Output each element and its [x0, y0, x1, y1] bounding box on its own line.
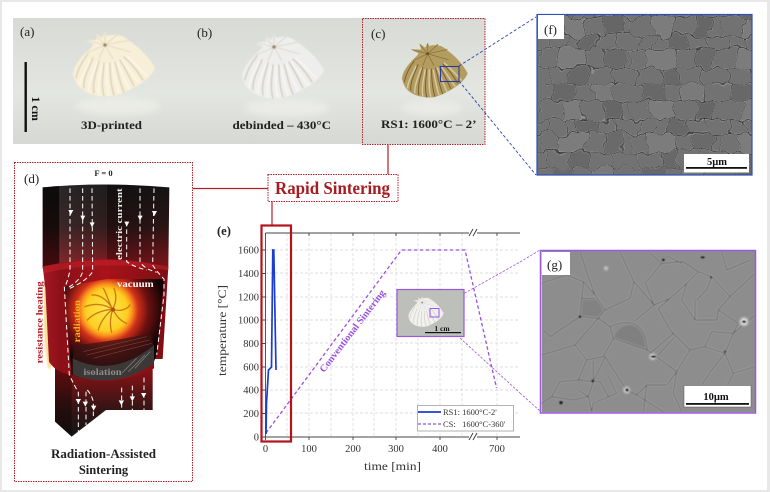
panel (d): radiation-assisted sintering — [14, 162, 192, 482]
shadow: debinded part — [245, 99, 329, 117]
x axis tick labels: 300 — [388, 444, 404, 455]
legend: CS: 1600°C-360' — [443, 419, 506, 429]
x axis tick labels: 200 — [345, 444, 361, 455]
highlight box (c) — [362, 18, 485, 144]
shadow: printed part — [76, 97, 160, 115]
label (f) — [538, 15, 564, 39]
inset photo: 1 cm — [434, 324, 450, 333]
connector: d to rapid sintering — [193, 188, 268, 190]
icon: sintered part — [402, 43, 468, 97]
x axis tick labels: 400 — [432, 444, 448, 455]
legend — [418, 406, 514, 431]
caption: RS1: RS1: 1600°C – 2’ — [381, 117, 477, 131]
callout: Rapid Sintering — [268, 174, 398, 202]
caption: radiation-assisted sintering — [51, 447, 156, 477]
curve label: conventional sintering: Conventional Sintering — [318, 288, 388, 375]
y axis tick labels: 1200 — [238, 292, 259, 304]
y axis title: temperature [°C] — [215, 285, 229, 376]
scale bar 1 cm — [24, 62, 43, 132]
label (f): (f) — [544, 22, 557, 37]
caption: 3D-printed: 3D-printed — [81, 118, 142, 132]
panel (f): SEM micrograph — [536, 14, 753, 176]
x axis tick labels: 100 — [301, 444, 317, 455]
x axis tick labels — [263, 444, 505, 455]
purple connector lines to panel g — [520, 250, 540, 411]
x axis title: time [min] — [364, 459, 421, 473]
x axis tick labels: 0 — [263, 444, 268, 455]
y axis tick labels: 1600 — [238, 246, 259, 256]
caption: radiation-assisted sintering: Sintering — [79, 463, 129, 477]
label: radiation: radiation — [72, 300, 82, 342]
panel: sample photographs — [13, 18, 485, 144]
inset connectors — [460, 262, 520, 394]
axis break marks — [469, 229, 477, 440]
chart axes — [262, 233, 520, 440]
label (c): (c) — [371, 26, 385, 41]
label (a): (a) — [20, 24, 34, 39]
icon: debinded part — [242, 34, 324, 98]
scale bar 10 µm — [684, 386, 751, 407]
connector: c to rapid sintering — [387, 144, 389, 174]
label (d): (d) — [24, 171, 39, 186]
label (g) — [542, 252, 570, 275]
blue connector lines to panel f — [459, 17, 536, 175]
scale bar 1 cm: 1 cm — [29, 96, 43, 121]
icon: 3D-printed part — [73, 32, 155, 96]
label F = 0: F = 0 — [94, 168, 113, 178]
label: isolation: isolation — [83, 367, 122, 377]
panel (g): SEM micrograph — [540, 250, 756, 413]
label: vacuum: vacuum — [117, 279, 154, 289]
label: electric current: electric current — [114, 188, 124, 260]
conventional sintering curve — [266, 250, 496, 433]
label (g): (g) — [547, 257, 562, 272]
label (e): (e) — [217, 224, 231, 238]
legend: RS1: 1600°C-2' — [443, 407, 497, 417]
y axis tick labels: 400 — [243, 386, 259, 396]
highlight rectangle: rapid sintering region — [262, 226, 291, 442]
y axis tick labels: 600 — [243, 362, 259, 374]
caption: debinded: debinded – 430°C — [232, 118, 331, 132]
scale bar 10 µm: 10µm — [703, 392, 729, 403]
connector: rapid sintering to chart — [271, 201, 273, 225]
scale bar 5 µm — [684, 154, 749, 172]
y axis tick labels: 1000 — [238, 316, 259, 326]
zoom marker on sintered part — [440, 66, 459, 82]
shadow: sintered part — [402, 100, 462, 116]
y axis tick labels: 800 — [243, 339, 259, 350]
caption: radiation-assisted sintering: Radiation-Assisted — [51, 447, 156, 461]
callout: Rapid Sintering: Rapid Sintering — [275, 178, 390, 198]
scale bar 5 µm: 5µm — [707, 157, 727, 168]
chart grid — [265, 233, 520, 437]
diagram: sintering tool — [35, 184, 169, 437]
panel (e): temperature chart — [215, 224, 520, 473]
y axis tick labels: 200 — [243, 409, 259, 420]
RS1 curve — [266, 250, 276, 434]
y axis tick labels: 1400 — [238, 269, 259, 280]
inset photo — [397, 290, 464, 336]
label (b): (b) — [197, 25, 212, 40]
y axis tick labels: 0 — [254, 432, 259, 444]
x axis tick labels: 700 — [489, 444, 505, 455]
y axis tick labels — [238, 246, 259, 444]
label: resistance heating: resistance heating — [35, 281, 45, 363]
